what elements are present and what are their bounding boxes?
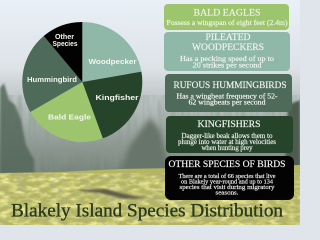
slice: Bald Eagle: Bald Eagle	[48, 112, 91, 122]
text: other species fact	[178, 173, 276, 196]
text: hummingbird fact: Has a wingbeat frequency of 52-	[176, 94, 278, 100]
panel: kingfishers	[166, 116, 293, 153]
slice: Kingfisher: Kingfisher	[96, 93, 139, 102]
text: woodpecker fact	[180, 56, 275, 70]
text: hummingbird fact: 62 wingbeats per second	[188, 100, 266, 106]
text: other species fact: species that visit during migratory	[180, 184, 275, 191]
heading: other species of birds: OTHER SPECIES OF BIRDS	[168, 160, 286, 170]
text: bald eagles fact: Possess a wingspan of eight feet (2.4m)	[166, 20, 288, 27]
pie chart: species distribution	[22, 22, 142, 142]
panel: pileated woodpeckers	[164, 32, 290, 71]
heading: bald eagles: BALD EAGLES	[194, 8, 260, 18]
panel: bald eagles	[164, 4, 289, 30]
text: woodpecker fact: 20 strikes per second	[192, 62, 262, 70]
heading: kingfishers: KINGFISHERS	[198, 119, 260, 129]
text: kingfisher fact: plunge into water at high velocities	[178, 139, 276, 146]
heading: pileated woodpeckers	[192, 33, 264, 53]
slice: Other Species	[44, 22, 82, 82]
text: other species fact: on Blakely year-round and up to 134	[181, 178, 274, 186]
text: hummingbird fact	[176, 94, 278, 106]
text: other species fact: seasons.	[216, 190, 239, 196]
slice: Woodpecker: Woodpecker	[88, 57, 137, 66]
text: kingfisher fact: when hunting prey	[202, 145, 253, 152]
slice: Other Species: Species	[52, 39, 78, 48]
text: kingfisher fact: Dagger-like beak allows them to	[182, 133, 273, 140]
title: Blakely Island Species Distribution	[11, 200, 284, 222]
heading: pileated woodpeckers: PILEATED	[206, 33, 251, 43]
heading: pileated woodpeckers: WOODPECKERS	[192, 43, 264, 53]
heading: rufous hummingbirds: RUFOUS HUMMINGBIRDS	[174, 80, 286, 90]
panel: other species of birds	[165, 156, 294, 200]
text: other species fact: There are a total of 66 species that live	[178, 173, 276, 180]
slice: Other Species: Other	[55, 32, 74, 41]
text: kingfisher fact	[178, 133, 276, 152]
slice: Hummingbird: Hummingbird	[27, 75, 77, 84]
panel: rufous hummingbirds	[165, 74, 292, 112]
text: woodpecker fact: Has a pecking speed of up to	[180, 56, 275, 63]
